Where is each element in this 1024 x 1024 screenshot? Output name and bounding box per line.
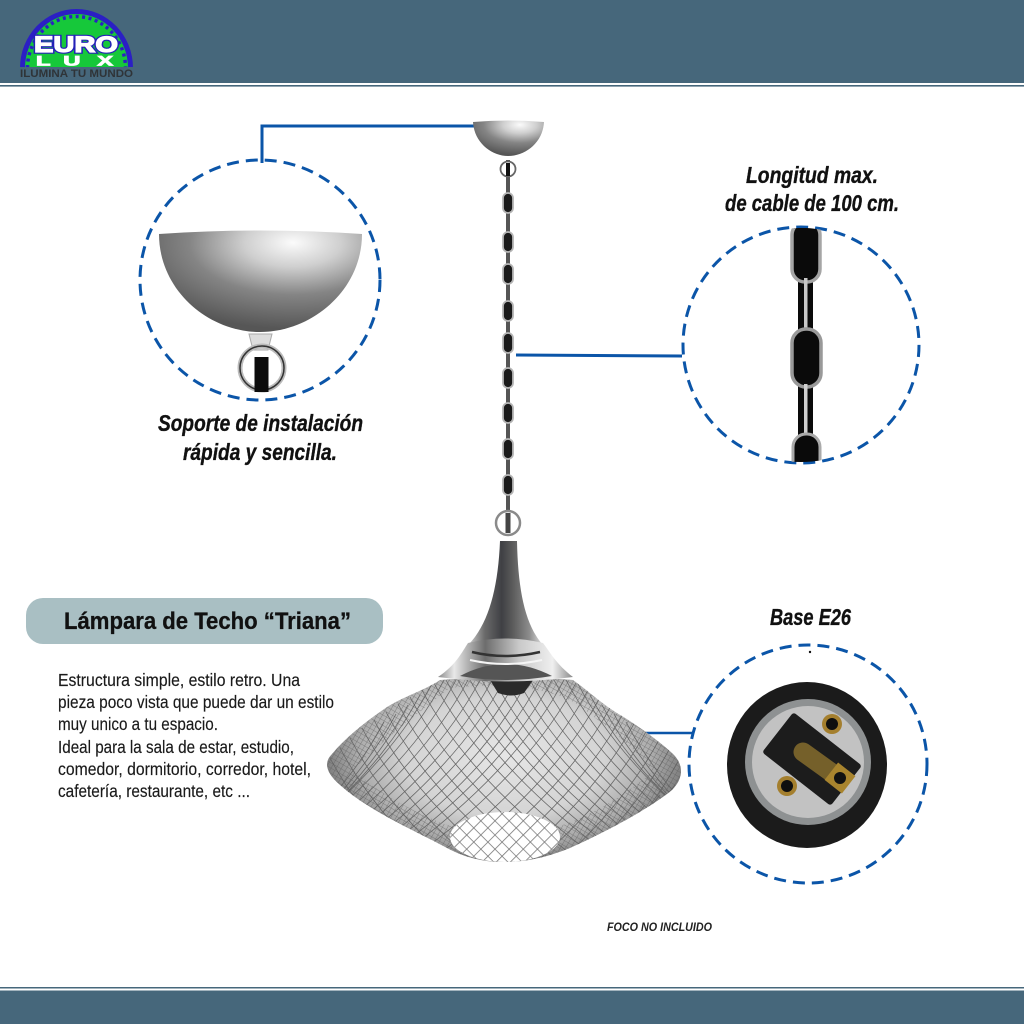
title pill: Lámpara de Techo “Triana” bbox=[64, 608, 351, 635]
metal mesh shade bbox=[327, 679, 681, 862]
description text: comedor, dormitorio, corredor, hotel, bbox=[58, 759, 311, 779]
caption: installation support bbox=[158, 410, 363, 465]
header band bbox=[0, 0, 1024, 87]
logo: Eurolux bbox=[20, 9, 134, 80]
description text: cafetería, restaurante, etc ... bbox=[58, 781, 250, 801]
connector: lamp to socket circle bbox=[642, 732, 692, 734]
pendant lamp bbox=[234, 120, 776, 923]
description text bbox=[58, 670, 334, 801]
logo: Eurolux: EURO bbox=[34, 32, 118, 57]
socket body bbox=[727, 682, 887, 848]
ring and stem bbox=[240, 334, 284, 392]
logo: Eurolux: ILUMINA TU MUNDO bbox=[20, 68, 133, 80]
detail circle: ceiling support bbox=[140, 160, 380, 400]
description text: Estructura simple, estilo retro. Una bbox=[58, 670, 300, 690]
description text: Ideal para la sala de estar, estudio, bbox=[58, 737, 294, 757]
detail circle: chain bbox=[683, 222, 919, 484]
hanging ring bbox=[496, 511, 520, 535]
caption: installation support: rápida y sencilla. bbox=[183, 439, 337, 465]
connector: ceiling support to circle bbox=[262, 126, 474, 163]
detail circle: E26 socket bbox=[689, 645, 927, 883]
caption: socket base: Base E26 bbox=[770, 604, 851, 630]
title pill bbox=[26, 598, 383, 644]
caption: cable length: de cable de 100 cm. bbox=[725, 190, 899, 216]
description text: muy unico a tu espacio. bbox=[58, 714, 218, 734]
logo: Eurolux: LUX bbox=[36, 53, 113, 69]
caption: cable length bbox=[725, 162, 899, 216]
chain bbox=[500, 160, 516, 515]
logo: Eurolux: EURO bbox=[34, 32, 118, 57]
big dome bbox=[159, 230, 362, 332]
footer band bbox=[0, 987, 1024, 1024]
caption: cable length: Longitud max. bbox=[746, 162, 878, 188]
connector: chain to circle bbox=[516, 355, 682, 356]
metal neck and skirt bbox=[438, 541, 573, 682]
ceiling cup bbox=[473, 120, 544, 156]
note: bulb not included: FOCO NO INCLUIDO bbox=[607, 922, 712, 934]
caption: installation support: Soporte de instalación bbox=[158, 410, 363, 436]
description text: pieza poco vista que puede dar un estilo bbox=[58, 692, 334, 712]
